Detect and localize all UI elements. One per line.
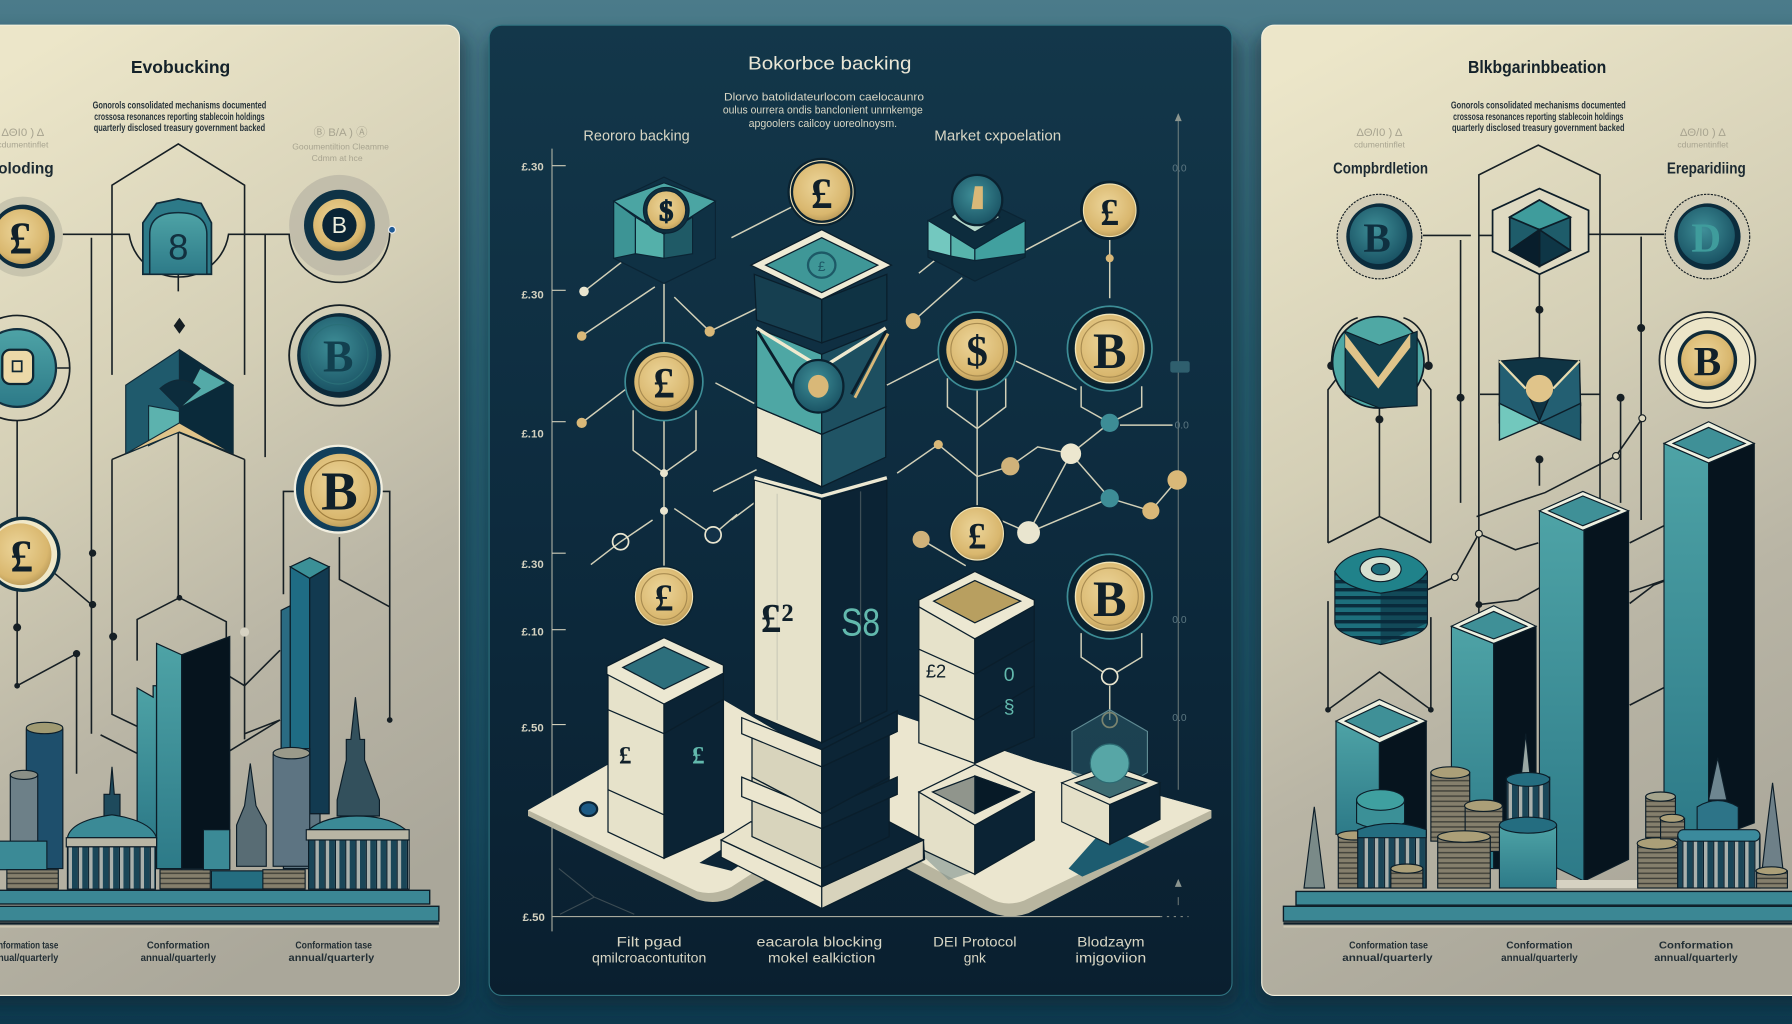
- text block: left dim captions: Gooumentiltion Cleamme: [292, 142, 389, 152]
- axis labels: left scale: £.10: [521, 626, 544, 638]
- text block: right footers: annual/quarterly: [1342, 953, 1433, 964]
- axis labels: right scale: 0.0: [1175, 421, 1189, 432]
- tower: dark cube cap: [751, 230, 891, 343]
- text block: right dim captions: ΔΘ/Ι0 ) Δ: [1680, 127, 1726, 139]
- axis labels: right scale: 0.0: [1172, 163, 1187, 174]
- icon: pound coin with halo: [0, 197, 63, 277]
- text block: right description: [1451, 101, 1626, 134]
- text block: left dim captions: Cdmm at hce: [312, 153, 363, 163]
- label: column heading right: Market cxpoelation: [934, 129, 1061, 145]
- tower: main shaft: £²: [761, 595, 794, 641]
- icon: envelope with gold head: [1499, 358, 1581, 440]
- text block: centre description: oulus ourrera ondis banclonient unrnkemge: [723, 105, 923, 117]
- network lines: centre: [582, 207, 1177, 720]
- label: right side heading left: Compbrdletion: [1333, 161, 1428, 178]
- icon: lower bitcoin coin: B: [1093, 571, 1126, 627]
- text block: left dim captions: [0, 126, 389, 163]
- text block: right dim captions: cdumentinflet: [1677, 139, 1729, 149]
- text block: right dim captions: cdumentinflet: [1354, 139, 1406, 149]
- icon: lower pound coin: [633, 566, 695, 627]
- icon: top gold coin: £: [811, 170, 833, 218]
- icon: teal bitcoin coin: [289, 305, 390, 406]
- icon: teal hex box with coin: $: [659, 197, 673, 228]
- text block: right footers: [1342, 941, 1738, 964]
- icon: pound coin with teal ring: £: [653, 360, 675, 408]
- text block: right footers: annual/quarterly: [1654, 953, 1738, 964]
- panel: centre dark sheet: [489, 25, 1239, 1006]
- axis labels: left scale: £.50: [523, 912, 545, 924]
- text block: left dim captions: Ⓑ B/A ) Ⓐ: [314, 126, 368, 139]
- text block: right footers: annual/quarterly: [1501, 953, 1578, 964]
- text block: bottom category labels: gnk: [964, 950, 986, 965]
- icon: open cube: [126, 350, 233, 454]
- heading: left title: Evobucking: [131, 57, 230, 77]
- text block: bottom category labels: qmilcroacontutiton: [592, 950, 706, 965]
- icon: hexagon cube: [1493, 189, 1589, 274]
- bar: right block with currency: §: [1004, 696, 1015, 718]
- icon: teal bitcoin coin dashed ring: [1337, 194, 1422, 279]
- base platform: left panel: [0, 890, 439, 927]
- text block: centre description: [723, 92, 924, 130]
- text block: bottom category labels: mokel ealkiction: [768, 950, 875, 965]
- icon: gold coin double ring: [1659, 312, 1755, 408]
- icon: pound coin with halo: £: [9, 213, 32, 264]
- bar chart: right bars: [1336, 422, 1754, 881]
- chart axes: [552, 113, 1189, 931]
- icon: right gold coin: [1080, 181, 1139, 240]
- network nodes: centre: [577, 254, 1187, 727]
- icon: dollar coin: $: [966, 328, 988, 376]
- bar: left block with pound signs: £: [619, 742, 631, 769]
- text block: right footers: Conformation tase: [1349, 941, 1429, 952]
- text block: right footers: Conformation: [1506, 941, 1573, 952]
- tower: main shaft: S8: [841, 601, 880, 644]
- heading: right title: Blkbgarinbbeation: [1468, 57, 1606, 77]
- text block: left footers: Conformation tase: [295, 941, 373, 952]
- icon: circle with chevron: [1333, 317, 1424, 408]
- tower: dark cube cap: £: [818, 259, 826, 274]
- icon: gold bitcoin coin: B: [321, 461, 358, 522]
- icon: small pound coin: £: [968, 516, 986, 557]
- text block: bottom category labels: DEI Protocol: [933, 934, 1017, 949]
- icon: teal coin stack: [1335, 549, 1427, 645]
- axis labels: left scale: £.30: [521, 559, 544, 571]
- bar: left block with pound signs: [607, 638, 723, 858]
- text block: left dim captions: ΔΘΙ0 ) Δ: [1, 127, 45, 139]
- label: column heading left: Reororo backing: [583, 129, 690, 145]
- bar: right block with currency: 0: [1004, 664, 1015, 686]
- icon: bitcoin coin large: [1067, 306, 1152, 391]
- network lines: left panel: [17, 144, 390, 774]
- tower: teal wedge with coin: [757, 328, 888, 434]
- icon: lower pound coin: £: [655, 577, 673, 619]
- axis labels: left scale: £.30: [521, 289, 544, 301]
- icon: teal bitcoin coin dashed ring: B: [1363, 214, 1391, 260]
- icon: top gold coin: [787, 158, 856, 226]
- bar: small open box: [919, 765, 1034, 874]
- icon: dollar coin: [938, 312, 1016, 390]
- icon: teal bitcoin coin: B: [323, 330, 354, 381]
- base platform: right panel: [1283, 891, 1792, 927]
- text block: bottom category labels: Filt pgad: [617, 934, 682, 949]
- skyline: left panel: [0, 697, 409, 889]
- tower: collar bands: [742, 711, 897, 829]
- axis labels: right scale: 0.0: [1172, 615, 1187, 626]
- icon: teal arch with number 8: 8: [168, 226, 188, 267]
- text block: left footers: Conformation: [147, 941, 210, 952]
- bar: right block with currency: [919, 571, 1034, 763]
- text block: centre description: apgoolers cailcoy uoreolnoysm.: [749, 118, 897, 130]
- text block: bottom category labels: Blodzaym: [1077, 934, 1145, 949]
- label: right side heading right: Ereparidiing: [1667, 161, 1746, 178]
- text block: right dim captions: [1354, 127, 1729, 149]
- icon: lower pound coin: [0, 517, 61, 592]
- icon: teal arch with number 8: [143, 199, 211, 274]
- text block: left description: quarterly disclosed treasury government backed: [94, 123, 265, 134]
- network nodes: left panel: [13, 318, 393, 723]
- text block: left description: crossosa resonances reporting stablecoin holdings: [94, 112, 265, 123]
- icon: bitcoin coin large: B: [1093, 323, 1126, 379]
- bar chart: left bars: [137, 558, 329, 869]
- text block: left footers: annual/quarterly: [289, 953, 375, 964]
- axis labels: left scale: £.30: [521, 161, 544, 173]
- network lines: right panel: [1328, 145, 1683, 710]
- icon: teal box with dark coin: [928, 175, 1025, 281]
- heading: centre title: Bokorbce backing: [748, 53, 911, 74]
- axis labels: left scale: [521, 161, 545, 924]
- central tower: [721, 230, 925, 909]
- bar: left block with pound signs: £: [692, 742, 705, 769]
- tower: main shaft: [754, 478, 887, 743]
- text block: bottom category labels: [592, 934, 1146, 965]
- text block: bottom category labels: imjgoviion: [1075, 950, 1146, 965]
- text block: right description: quarterly disclosed treasury government backed: [1452, 123, 1625, 134]
- icon: lower pound coin: £: [10, 530, 33, 581]
- panel: right light sheet: [1255, 25, 1792, 1006]
- icon: small pound coin: [949, 505, 1006, 562]
- icon: dark coin with gold ring: B: [332, 212, 347, 238]
- tower: middle cream block: [757, 383, 886, 487]
- icon: gold bitcoin coin: [294, 445, 383, 534]
- icon: teal D coin dashed ring: [1665, 194, 1750, 279]
- text block: right footers: Conformation: [1659, 941, 1733, 952]
- text block: bottom category labels: eacarola blocking: [757, 934, 882, 949]
- axis labels: right scale: 0.0: [1172, 713, 1187, 724]
- text block: left footers: [0, 941, 375, 964]
- tower: lower base: [721, 777, 925, 909]
- icon: teal D coin dashed ring: D: [1691, 214, 1721, 260]
- text block: centre description: Dlorvo batolidateurlocom caelocaunro: [724, 92, 924, 104]
- icon: teal ring with lock: [0, 315, 70, 421]
- icon: gold coin double ring: B: [1694, 338, 1721, 384]
- text block: right dim captions: ΔΘ/Ι0 ) Δ: [1356, 127, 1403, 139]
- panel: left light sheet: [0, 25, 466, 1006]
- skyline: right panel: [1304, 734, 1787, 888]
- text block: left description: [93, 101, 266, 134]
- bar: right block with currency: £2: [926, 661, 946, 682]
- axis labels: left scale: £.50: [521, 722, 544, 734]
- axis labels: left scale: £.10: [521, 429, 544, 441]
- icon: right gold coin: £: [1100, 192, 1119, 234]
- icon: glass box with teal coin: [1062, 710, 1160, 845]
- text block: right description: Gonorols consolidated mechanisms documented: [1451, 101, 1626, 112]
- icon: dark coin with gold ring: [289, 175, 395, 275]
- network nodes: right panel: [1325, 306, 1646, 713]
- text block: right description: crossosa resonances reporting stablecoin holdings: [1453, 112, 1623, 123]
- text block: left footers: annual/quarterly: [141, 953, 217, 964]
- isometric platform: [528, 699, 1211, 916]
- text block: left description: Gonorols consolidated mechanisms documented: [93, 101, 266, 112]
- icon: pound coin with teal ring: [625, 343, 703, 421]
- icon: lower bitcoin coin: [1067, 554, 1152, 639]
- axis labels: right scale: [1170, 163, 1190, 724]
- icon: teal hex box with coin: [614, 177, 715, 283]
